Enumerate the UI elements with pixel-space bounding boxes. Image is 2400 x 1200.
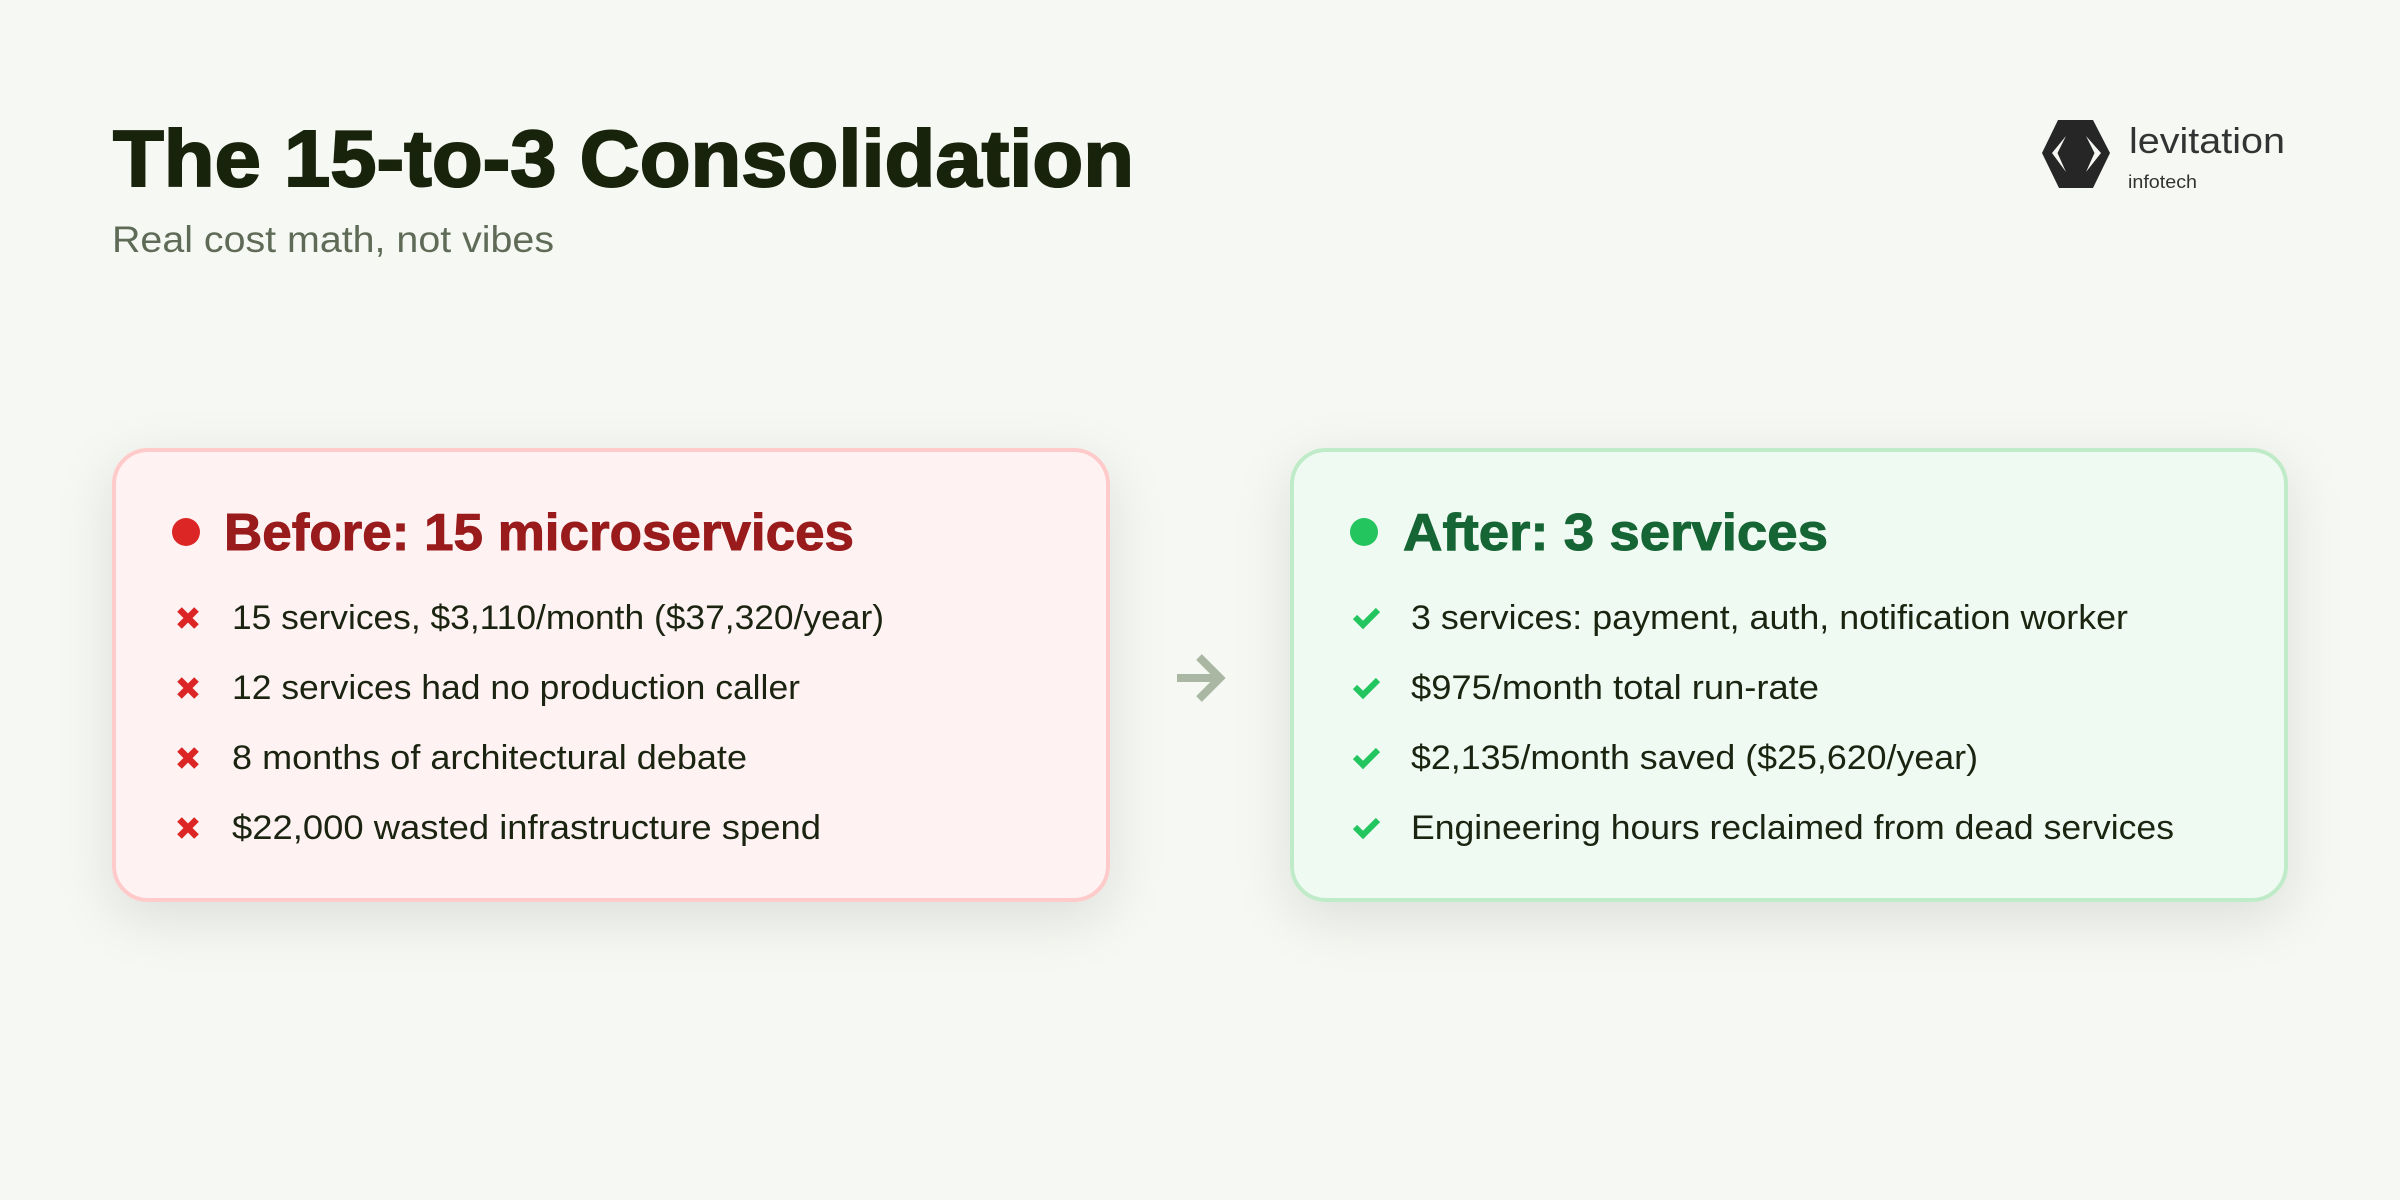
after item 2: $975/month total run-rate [1411, 669, 1819, 707]
after item 1: 3 services: payment, auth, notification worker [1411, 599, 2128, 637]
before heading: Before: 15 microservices [224, 504, 854, 562]
before item 3: 8 months of architectural debate [232, 739, 747, 777]
panel background [1292, 450, 2286, 900]
icon: hexagon logo [2042, 120, 2110, 188]
logo subtext: infotech [2128, 172, 2197, 192]
before item 4: $22,000 wasted infrastructure spend [232, 809, 821, 847]
before item 1: 15 services, $3,110/month ($37,320/year) [232, 599, 884, 637]
subtitle: Real cost math, not vibes [112, 219, 554, 260]
logo: levitation infotech [2042, 120, 2285, 192]
before status dot [172, 518, 200, 546]
title: The 15-to-3 Consolidation [113, 114, 1134, 203]
logo wordmark: levitation [2129, 120, 2285, 161]
panel: before [114, 450, 1108, 900]
before item 2: 12 services had no production caller [232, 669, 800, 707]
after item 3: $2,135/month saved ($25,620/year) [1411, 739, 1978, 777]
panel: after [1292, 450, 2286, 900]
panel background [114, 450, 1108, 900]
after item 4: Engineering hours reclaimed from dead services [1411, 809, 2174, 847]
after heading: After: 3 services [1403, 504, 1828, 562]
after status dot [1350, 518, 1378, 546]
arrow [1177, 657, 1220, 699]
